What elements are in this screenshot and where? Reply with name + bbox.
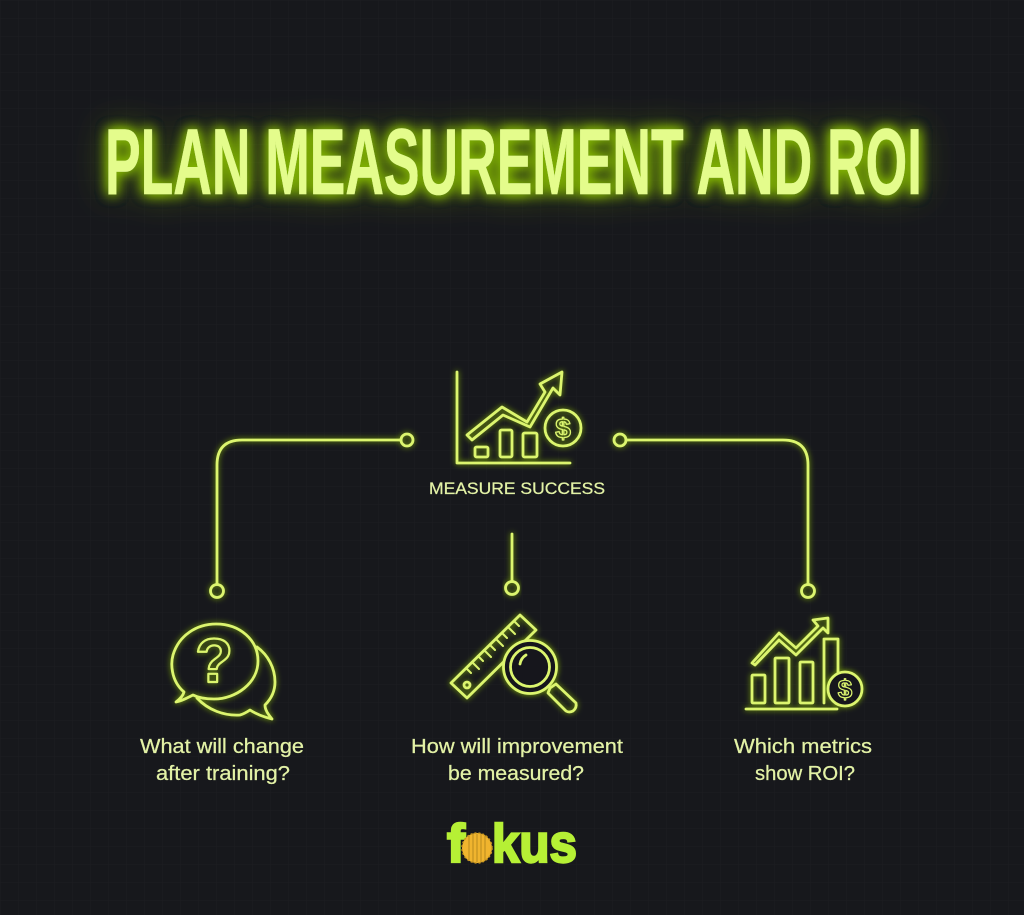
connector: right [614,434,814,598]
label: what will change: What will change [140,736,304,758]
connector: middle [506,534,518,594]
icon: growth chart with dollar coin: $ [555,413,571,444]
label: what will change: after training? [156,763,290,785]
heading: measure success: MEASURE SUCCESS [429,479,605,498]
icon: bar chart with coin [746,618,862,709]
logo: fokus: f [447,814,466,874]
icon: growth chart with dollar coin [457,372,581,463]
icon: question speech bubbles [172,624,275,719]
label: how will improvement: How will improvement [411,736,623,758]
label: which metrics: Which metrics [734,736,872,758]
logo: fokus [447,814,577,874]
label: which metrics: show ROI? [755,763,855,785]
icon: bar chart with coin: $ [838,674,853,704]
label: how will improvement: be measured? [448,763,584,785]
connector: left [210,434,413,598]
icon: question speech bubbles: ? [195,627,233,696]
logo: fokus: kus [492,814,577,874]
icon: ruler and magnifying glass [451,615,576,712]
